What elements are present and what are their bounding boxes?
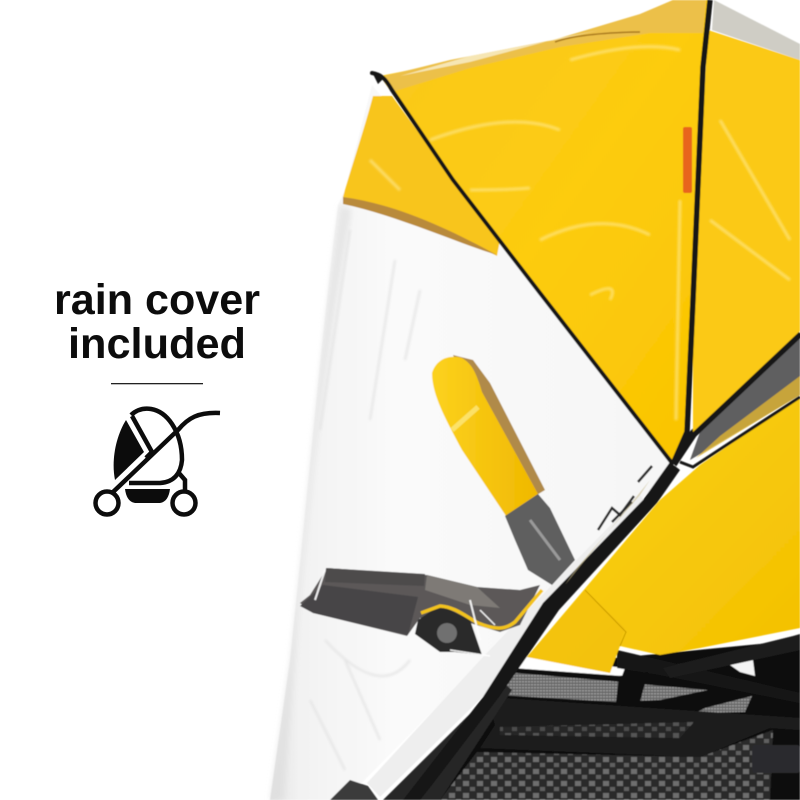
- canopy main panel: [380, 0, 708, 463]
- canopy black seams: [372, 73, 672, 463]
- yellow line: [421, 590, 542, 628]
- undercarriage and mesh basket: [410, 634, 800, 800]
- canopy side flap: [343, 96, 500, 256]
- canopy right panel: [693, 30, 800, 432]
- film glare at canopy top: [385, 0, 706, 92]
- canopy wrinkles: [370, 47, 790, 420]
- fine mesh strips: [497, 672, 622, 702]
- handle grey collar: [505, 494, 575, 585]
- clear plastic cover: [270, 85, 680, 800]
- film creases near hinge: [598, 466, 652, 530]
- heading: rain cover included: rain cover: [54, 276, 260, 324]
- orange zip tab: [683, 127, 692, 193]
- film edge shading: [270, 205, 352, 800]
- film highlights: [315, 570, 495, 656]
- icon: stroller with rain cover: [96, 409, 220, 514]
- divider line: [111, 383, 203, 384]
- film panel over hinge: [673, 333, 800, 467]
- photo: stroller under clear rain cover: [270, 0, 800, 800]
- coarse mesh panel: [440, 730, 773, 800]
- black strap band: [480, 697, 800, 757]
- heading: rain cover included: included: [68, 320, 246, 368]
- armrest and wheel hub: [300, 568, 542, 655]
- frame struts: [617, 650, 800, 703]
- silver strip and black frame seam: [367, 495, 648, 797]
- white gap under seat: [512, 655, 625, 676]
- wheel knob: [437, 623, 457, 643]
- heading: rain cover included: [54, 276, 260, 368]
- stroller handle: [432, 355, 575, 585]
- canopy lip: [343, 197, 497, 255]
- yellow seat fabric: [527, 397, 800, 673]
